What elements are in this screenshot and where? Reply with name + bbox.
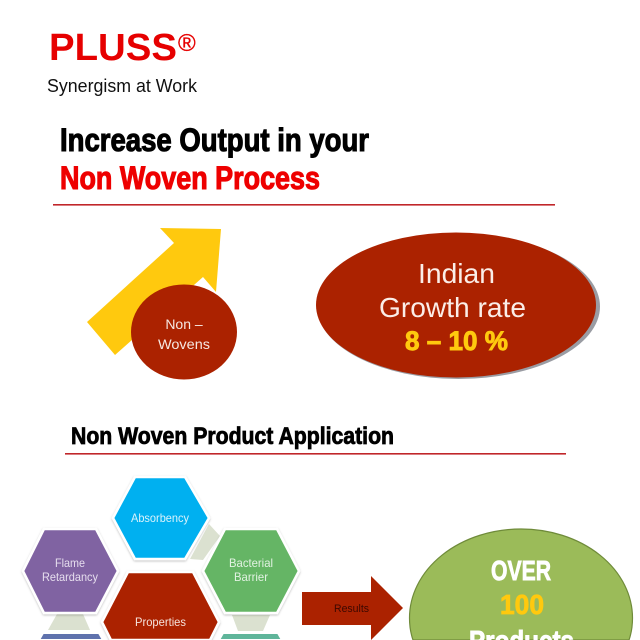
callout: Indian growth rate: Indian (418, 258, 495, 289)
circle: Non-Wovens: Wovens (158, 336, 210, 352)
callout: over 100 products: OVER (491, 555, 551, 586)
hexagon: Flame Retardancy: Retardancy (42, 570, 98, 584)
hexagon: Flame Retardancy: Flame (55, 556, 85, 570)
hexagon: Bacterial Barrier: Barrier (234, 570, 268, 584)
callout: over 100 products (410, 529, 632, 640)
hexagon: Absorbency (113, 477, 209, 559)
tagline: Synergism at Work (47, 76, 198, 96)
icon: yellow arrow (87, 228, 221, 355)
hexagon: Flame Retardancy (23, 529, 118, 613)
logo: PLUSS: ® (178, 30, 196, 57)
growth arrow with Non-Wovens circle (87, 228, 237, 380)
arrow: Results (302, 576, 403, 640)
hexagon diagram: properties (23, 477, 299, 640)
hexagon: Bacterial Barrier (203, 529, 299, 613)
hexagon: bottom right (219, 633, 282, 640)
circle: Non-Wovens (131, 284, 237, 380)
callout: Indian growth rate (316, 232, 600, 379)
arrow: Results: Results (334, 603, 369, 615)
logo: PLUSS: PLUSS (49, 27, 177, 69)
main heading: Non Woven Process (60, 160, 320, 196)
callout: Indian growth rate: 8 – 10 % (405, 326, 508, 356)
callout: Indian growth rate: Growth rate (379, 292, 526, 323)
hexagon: Properties (102, 572, 219, 640)
hexagon: Bacterial Barrier: Bacterial (229, 556, 273, 570)
callout: over 100 products: 100 (500, 589, 544, 620)
hexagon: Properties: Properties (135, 615, 186, 629)
main heading (60, 122, 369, 196)
circle: Non-Wovens: Non – (165, 316, 203, 332)
hexagon: bottom left (39, 633, 103, 640)
main heading: Increase Output in your (60, 122, 369, 158)
section heading: Non Woven Product Application (71, 423, 394, 450)
hexagon: Absorbency: Absorbency (131, 511, 189, 525)
